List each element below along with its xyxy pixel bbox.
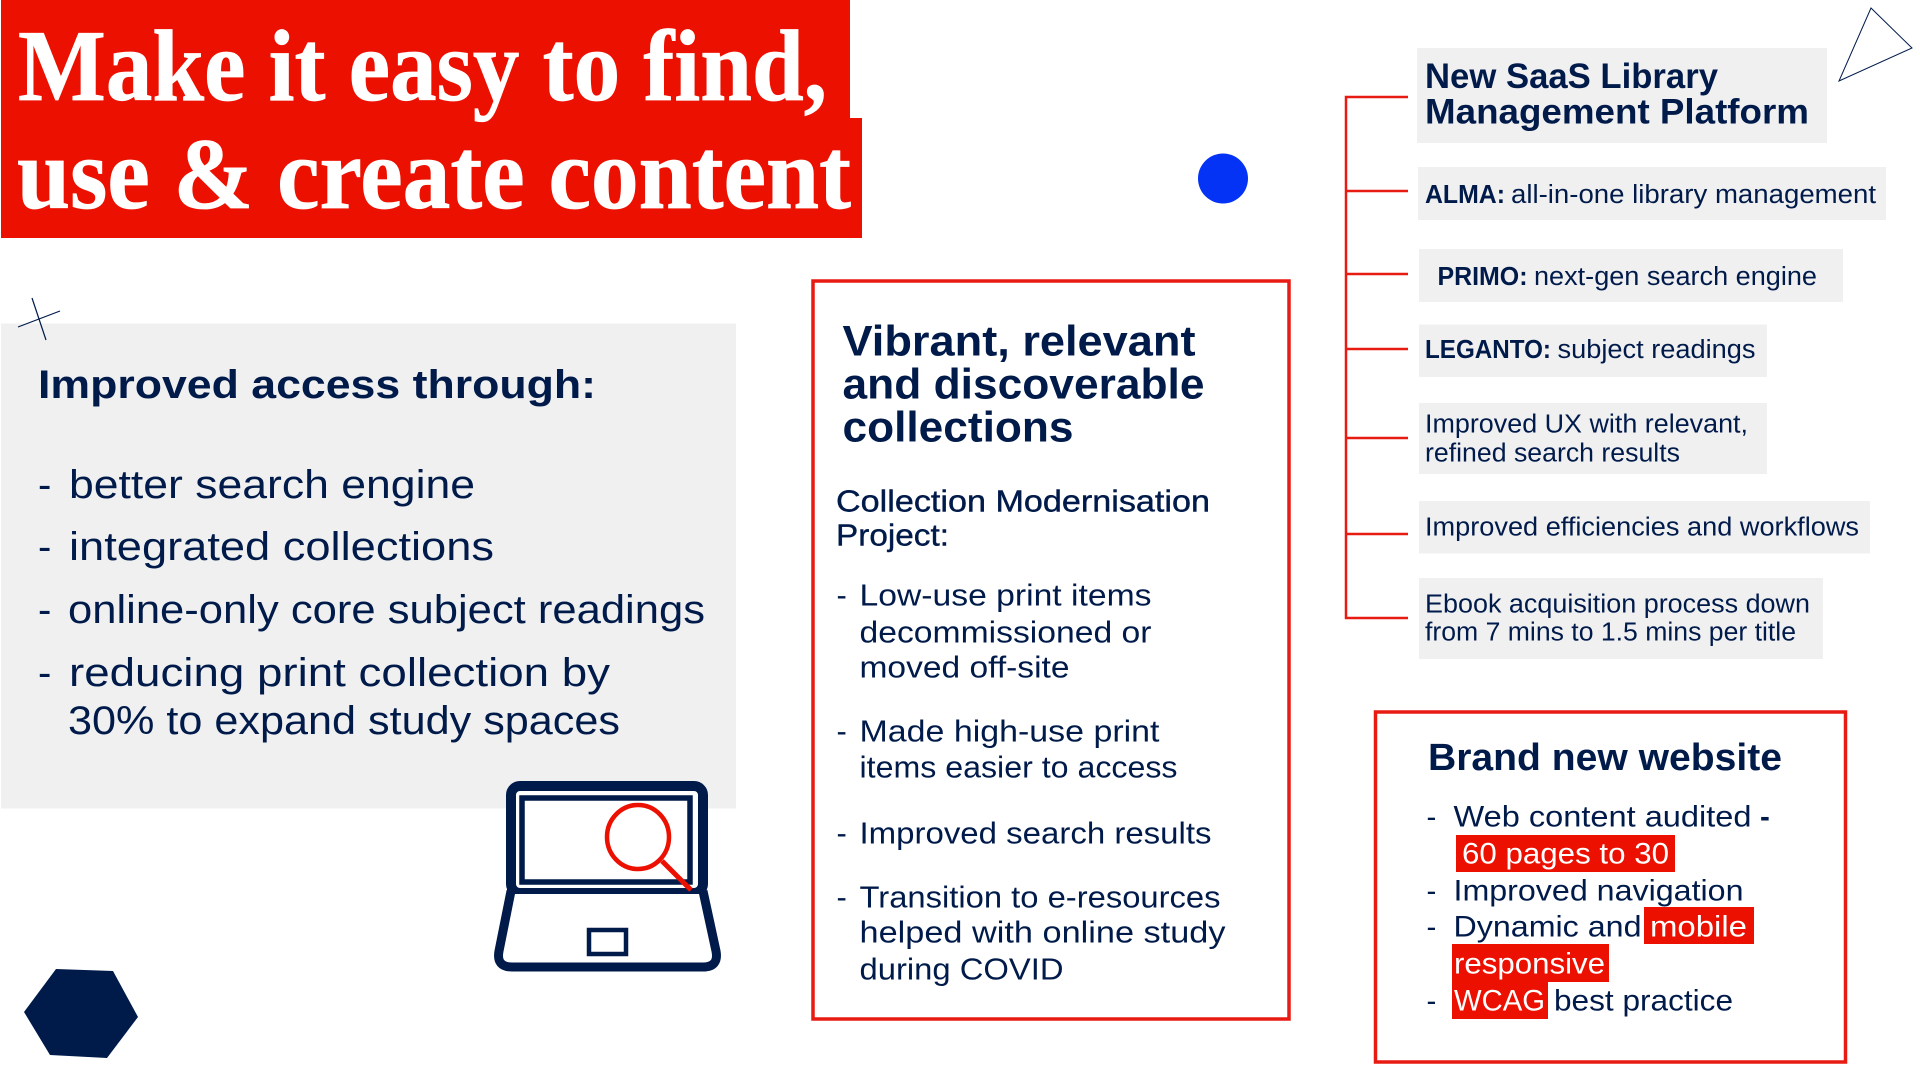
icon: blue circle (1198, 154, 1248, 204)
list: collection changes: - (836, 578, 847, 612)
item: PRIMO (1419, 249, 1843, 302)
panel: new SaaS platform (1417, 48, 1827, 143)
list: website changes: - (1426, 800, 1436, 834)
item: ebook acquisition (1419, 578, 1823, 659)
list: collection changes: moved off-site (860, 650, 1070, 684)
list: collection changes: - (836, 816, 847, 850)
item: improved efficiencies: Improved efficiencies and workflows (1425, 514, 1859, 542)
item: improved UX: refined search results (1425, 440, 1680, 468)
list: access improvements: - (38, 651, 51, 695)
list: website changes: mobile (1650, 910, 1747, 944)
item: ebook acquisition: Ebook acquisition process down (1425, 590, 1810, 618)
heading: improved access through: Improved access through: (38, 363, 596, 407)
list: collection changes: - (836, 714, 847, 748)
item: LEGANTO (1419, 324, 1767, 377)
list: access improvements: - (38, 525, 51, 569)
item: ALMA: all-in-one library management (1511, 181, 1876, 209)
list: access improvements (38, 463, 705, 743)
item: ALMA: ALMA: (1425, 181, 1505, 209)
list: collection changes: during COVID (860, 952, 1064, 986)
subheading: collection modernisation project: Project: (836, 518, 949, 552)
panel: new SaaS platform: New SaaS Library (1425, 57, 1719, 96)
list: access improvements: online-only core subject readings (68, 588, 705, 632)
list: collection changes: Improved search results (860, 816, 1212, 850)
list: access improvements: 30% to expand study spaces (68, 699, 620, 743)
subheading: collection modernisation project (836, 484, 1210, 552)
list: collection changes: decommissioned or (860, 614, 1152, 650)
item: LEGANTO: subject readings (1558, 336, 1756, 364)
heading: vibrant collections: collections (842, 404, 1074, 452)
list: website changes: Web content audited (1454, 800, 1752, 834)
list: website changes: - (1426, 874, 1436, 908)
heading: vibrant collections: Vibrant, relevant (842, 318, 1196, 366)
list: collection changes: Low-use print items (860, 578, 1152, 612)
heading: brand new website: Brand new website (1428, 737, 1782, 779)
list: website changes (1426, 800, 1770, 1019)
list: website changes: Dynamic and (1454, 910, 1642, 944)
icon: cross mark (18, 298, 60, 340)
list: collection changes: Transition to e-resources (860, 880, 1220, 914)
item: ebook acquisition: from 7 mins to 1.5 mins per title (1425, 618, 1796, 646)
item: PRIMO: next-gen search engine (1534, 263, 1817, 291)
item: improved UX: Improved UX with relevant, (1425, 410, 1748, 438)
icon: navy hexagon (24, 969, 138, 1058)
title banner: Make it easy to find, (18, 10, 827, 123)
item: PRIMO: PRIMO: (1438, 263, 1528, 291)
list: website changes: - (1426, 984, 1436, 1018)
list: collection changes (836, 578, 1226, 986)
subheading: collection modernisation project: Collection Modernisation (836, 484, 1210, 518)
item: ALMA (1418, 167, 1886, 220)
icon: outline triangle (1839, 8, 1912, 81)
list: website changes: best practice (1554, 984, 1733, 1018)
list: website changes: responsive (1454, 948, 1605, 980)
item: LEGANTO: LEGANTO: (1425, 336, 1551, 364)
item: improved UX (1419, 403, 1767, 474)
list: access improvements: - (38, 463, 51, 507)
connector tree (1346, 97, 1408, 618)
list: collection changes: Made high-use print (860, 714, 1160, 748)
list: access improvements: integrated collections (69, 525, 494, 569)
title banner: use & create content (17, 118, 851, 231)
list: access improvements: better search engine (69, 463, 475, 507)
list: access improvements: - (38, 588, 51, 632)
heading: vibrant collections (842, 318, 1204, 452)
list: access improvements: reducing print collection by (69, 651, 610, 695)
heading: vibrant collections: and discoverable (842, 360, 1204, 408)
list: website changes: - (1760, 800, 1770, 834)
list: collection changes: items easier to access (860, 750, 1178, 784)
panel: vibrant collections (813, 281, 1289, 1019)
list: collection changes: - (836, 880, 847, 914)
list: website changes: - (1426, 910, 1436, 944)
list: website changes: WCAG (1454, 984, 1545, 1018)
list: website changes: Improved navigation (1454, 874, 1744, 908)
panel: new SaaS platform: Management Platform (1425, 92, 1809, 132)
icon: laptop with magnifier (499, 786, 716, 967)
list: website changes: 60 pages to 30 (1462, 838, 1669, 870)
panel: brand new website (1376, 712, 1846, 1062)
title banner (1, 0, 862, 238)
panel: improved access (1, 324, 736, 808)
item: improved efficiencies (1419, 501, 1870, 554)
list: collection changes: helped with online study (860, 914, 1226, 950)
